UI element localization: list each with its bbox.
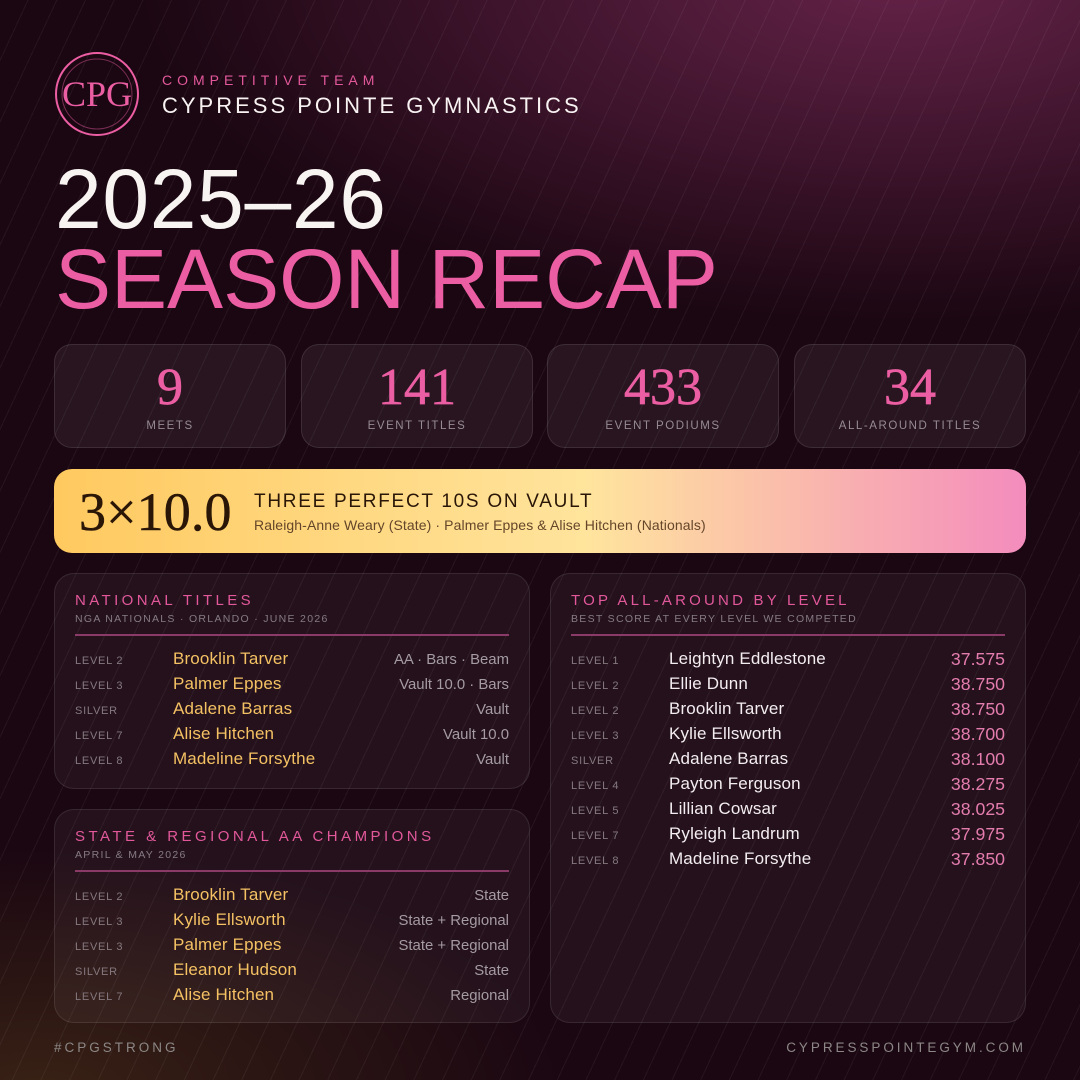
row: Brooklin Tarver [75, 649, 509, 668]
panel: national titles [54, 573, 530, 789]
row: Adalene Barras: SILVER [571, 755, 614, 767]
row: Payton Ferguson [571, 774, 1005, 794]
row: Brooklin Tarver: 38.750 [951, 699, 1005, 719]
logo: CPG monogram: CPG [62, 74, 132, 114]
stat card: event podiums: 433 [624, 359, 702, 416]
panel heading: STATE & REGIONAL AA CHAMPIONS [75, 828, 435, 845]
row: Adalene Barras: Vault [476, 702, 509, 718]
row: Alise Hitchen [75, 985, 509, 1004]
stat card: event titles: EVENT TITLES [368, 420, 466, 432]
row: Brooklin Tarver: Brooklin Tarver [173, 649, 288, 668]
row: Ellie Dunn: 38.750 [951, 674, 1005, 694]
logo: CPG monogram [55, 52, 139, 136]
row: Eleanor Hudson [75, 960, 509, 979]
row: Ryleigh Landrum: 37.975 [951, 824, 1005, 844]
stat card: event titles [301, 344, 533, 448]
row: Lillian Cowsar: 38.025 [951, 799, 1005, 819]
row: Alise Hitchen: Vault 10.0 [443, 727, 509, 743]
row: Palmer Eppes: State + Regional [398, 938, 509, 954]
row: Kylie Ellsworth: 38.700 [951, 724, 1005, 744]
eyebrow: competitive team: COMPETITIVE TEAM [162, 72, 379, 88]
row: Madeline Forsythe: Vault [476, 752, 509, 768]
row: Eleanor Hudson: Eleanor Hudson [173, 960, 297, 979]
row: Adalene Barras [75, 699, 509, 718]
row: Alise Hitchen: LEVEL 7 [75, 991, 123, 1003]
row: Madeline Forsythe [571, 849, 1005, 869]
row: Payton Ferguson: 38.275 [951, 774, 1005, 794]
row: Palmer Eppes: LEVEL 3 [75, 680, 123, 692]
row: Palmer Eppes: Palmer Eppes [173, 674, 282, 693]
row: Eleanor Hudson: State [474, 963, 509, 979]
row: Brooklin Tarver: LEVEL 2 [75, 655, 123, 667]
row: Ryleigh Landrum: LEVEL 7 [571, 830, 619, 842]
stat card: all-around titles: ALL-AROUND TITLES [839, 420, 981, 432]
row: Payton Ferguson: LEVEL 4 [571, 780, 619, 792]
panel heading: TOP ALL-AROUND BY LEVEL [571, 592, 850, 609]
panel subheading: APRIL & MAY 2026 [75, 849, 187, 861]
row: Palmer Eppes [75, 935, 509, 954]
row: Kylie Ellsworth: LEVEL 3 [571, 730, 619, 742]
stat card: event titles: 141 [378, 359, 456, 416]
row: Brooklin Tarver: AA · Bars · Beam [394, 652, 509, 668]
row: Leightyn Eddlestone: 37.575 [951, 649, 1005, 669]
row: Madeline Forsythe: LEVEL 8 [75, 755, 123, 767]
row: Brooklin Tarver: LEVEL 2 [75, 891, 123, 903]
title: 2025–26 season recap: SEASON RECAP [55, 232, 718, 326]
row: Kylie Ellsworth: Kylie Ellsworth [669, 724, 782, 743]
row: Brooklin Tarver: Brooklin Tarver [669, 699, 784, 718]
stat card: all-around titles [794, 344, 1026, 448]
panel subheading: NGA NATIONALS · ORLANDO · JUNE 2026 [75, 613, 329, 625]
row: Ellie Dunn: LEVEL 2 [571, 680, 619, 692]
row: Ryleigh Landrum [571, 824, 1005, 844]
row: Palmer Eppes: Palmer Eppes [173, 935, 282, 954]
row: Madeline Forsythe [75, 749, 509, 768]
row: Payton Ferguson: Payton Ferguson [669, 774, 801, 793]
highlight banner: three perfect tens [54, 469, 1026, 553]
row: Brooklin Tarver: Brooklin Tarver [173, 885, 288, 904]
banner headline: THREE PERFECT 10S ON VAULT [254, 491, 593, 512]
banner score: 3×10.0 [79, 482, 232, 542]
row: Brooklin Tarver [75, 885, 509, 904]
row: Ellie Dunn: Ellie Dunn [669, 674, 748, 693]
stat card: event podiums: EVENT PODIUMS [605, 420, 721, 432]
panel heading: NATIONAL TITLES [75, 592, 254, 609]
row: Kylie Ellsworth: Kylie Ellsworth [173, 910, 286, 929]
row: Palmer Eppes: Vault 10.0 · Bars [399, 677, 509, 693]
row: Brooklin Tarver: LEVEL 2 [571, 705, 619, 717]
row: Ryleigh Landrum: Ryleigh Landrum [669, 824, 800, 843]
row: Palmer Eppes [75, 674, 509, 693]
row: Adalene Barras: SILVER [75, 705, 118, 717]
panel: top all-around by level [550, 573, 1026, 1023]
row: Adalene Barras: Adalene Barras [669, 749, 788, 768]
stat card: event podiums [547, 344, 779, 448]
stat card: meets [54, 344, 286, 448]
banner names: Raleigh-Anne Weary (State) · Palmer Eppes & Alise Hitchen (Nationals) [254, 517, 706, 533]
title: 2025–26 season recap [55, 152, 718, 326]
row: Alise Hitchen: Alise Hitchen [173, 724, 274, 743]
row: Madeline Forsythe: Madeline Forsythe [173, 749, 315, 768]
organisation name: CYPRESS POINTE GYMNASTICS [162, 93, 582, 118]
row: Brooklin Tarver: State [474, 888, 509, 904]
panel: state and regional AA champions [54, 809, 530, 1023]
row: Kylie Ellsworth [571, 724, 1005, 744]
row: Adalene Barras [571, 749, 1005, 769]
row: Kylie Ellsworth: LEVEL 3 [75, 916, 123, 928]
row: Alise Hitchen: Alise Hitchen [173, 985, 274, 1004]
stat card: all-around titles: 34 [884, 359, 936, 416]
row: Kylie Ellsworth: State + Regional [398, 913, 509, 929]
row: Palmer Eppes: LEVEL 3 [75, 941, 123, 953]
row: Kylie Ellsworth [75, 910, 509, 929]
row: Eleanor Hudson: SILVER [75, 966, 118, 978]
title: 2025–26 season recap: 2025–26 [55, 152, 387, 246]
row: Ellie Dunn [571, 674, 1005, 694]
row: Leightyn Eddlestone: Leightyn Eddlestone [669, 649, 826, 668]
stat card: meets: 9 [157, 359, 183, 416]
footer website: CYPRESSPOINTEGYM.COM [786, 1040, 1026, 1055]
stat card: meets: MEETS [146, 420, 194, 432]
row: Lillian Cowsar: Lillian Cowsar [669, 799, 777, 818]
row: Madeline Forsythe: LEVEL 8 [571, 855, 619, 867]
row: Madeline Forsythe: 37.850 [951, 849, 1005, 869]
row: Adalene Barras: Adalene Barras [173, 699, 292, 718]
row: Adalene Barras: 38.100 [951, 749, 1005, 769]
row: Leightyn Eddlestone [571, 649, 1005, 669]
row: Alise Hitchen: LEVEL 7 [75, 730, 123, 742]
row: Lillian Cowsar [571, 799, 1005, 819]
row: Lillian Cowsar: LEVEL 5 [571, 805, 619, 817]
row: Brooklin Tarver [571, 699, 1005, 719]
row: Alise Hitchen: Regional [450, 988, 509, 1004]
row: Madeline Forsythe: Madeline Forsythe [669, 849, 811, 868]
row: Alise Hitchen [75, 724, 509, 743]
row: Leightyn Eddlestone: LEVEL 1 [571, 655, 619, 667]
footer hashtag: #CPGSTRONG [54, 1040, 179, 1055]
panel subheading: BEST SCORE AT EVERY LEVEL WE COMPETED [571, 613, 857, 625]
